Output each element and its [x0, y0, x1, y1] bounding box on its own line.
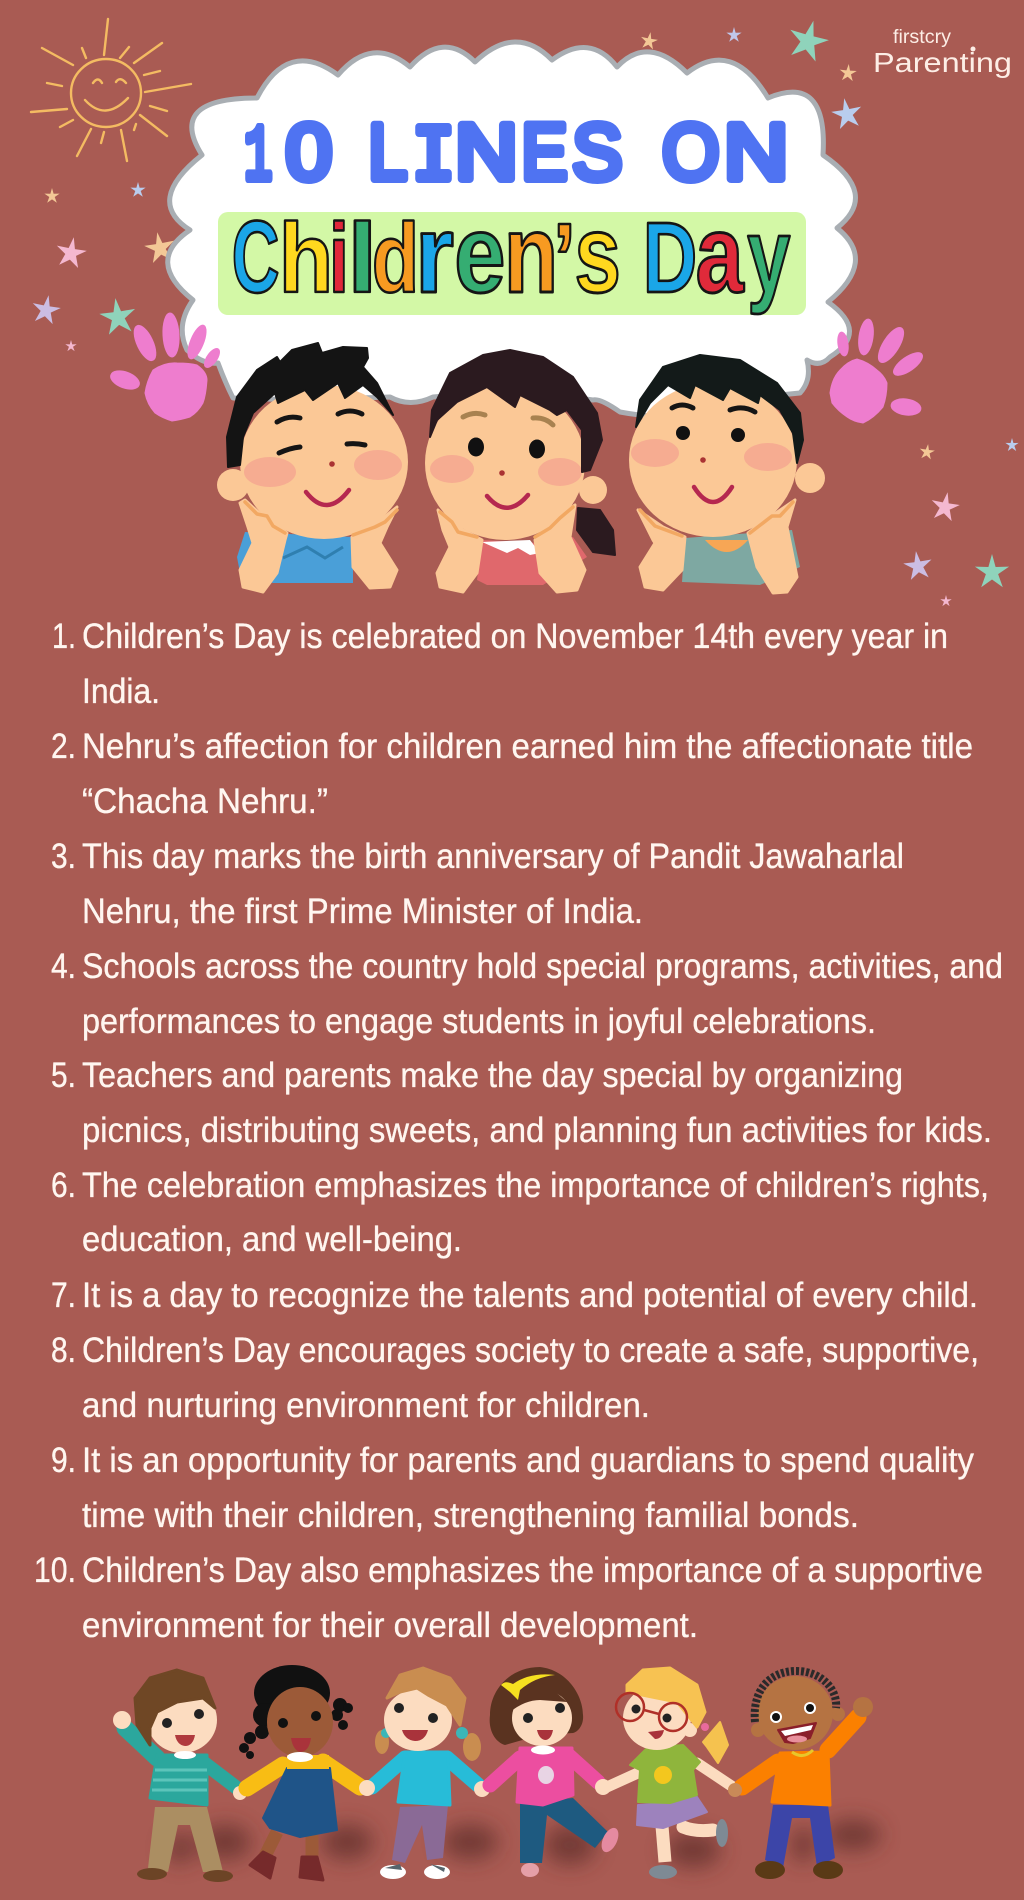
- heading plate: Children's Day: s: [574, 191, 621, 316]
- item 6: education, and well-being.: [82, 1220, 462, 1259]
- item 1: India.: [82, 672, 160, 711]
- illustration: six children holding hands: [113, 1665, 881, 1882]
- item 10: 10.: [34, 1551, 76, 1590]
- heading: 10 LINES ON: N: [724, 108, 788, 196]
- title cloud panel: [168, 42, 855, 416]
- item 2: 2.: [51, 727, 76, 766]
- child 3: blue sweater: [359, 1668, 490, 1879]
- heading plate: Children's Day: l: [348, 203, 377, 313]
- heading plate: Children's Day: [218, 191, 806, 317]
- item 3: [51, 837, 904, 931]
- illustration: three kids resting chins on hands: [217, 343, 825, 593]
- heading plate: Children's Day: D: [643, 202, 697, 313]
- heading: 10 LINES ON: [244, 108, 788, 203]
- heading plate: Children's Day: C: [232, 201, 279, 315]
- item 4: [51, 947, 1003, 1041]
- heading plate: Children's Day: ’: [553, 204, 576, 314]
- item 9: 9.: [51, 1441, 76, 1480]
- item 10: [34, 1551, 983, 1645]
- heading plate: Children's Day: y: [747, 196, 791, 315]
- item 4: performances to engage students in joyful celebrations.: [82, 1002, 876, 1041]
- item 6: [51, 1166, 989, 1259]
- item 1: 1.: [52, 617, 76, 656]
- item 2: Nehru’s affection for children earned him the affectionate title: [82, 727, 973, 766]
- heading plate: Children's Day: e: [454, 192, 506, 316]
- heading plate: Children's Day: a: [696, 193, 744, 317]
- item 7: 7.: [51, 1276, 76, 1315]
- item 3: This day marks the birth anniversary of Pandit Jawaharlal: [82, 837, 904, 876]
- heading plate: Children's Day: i: [329, 204, 349, 314]
- item 8: 8.: [51, 1331, 76, 1370]
- item 3: 3.: [51, 837, 76, 876]
- heading: 10 LINES ON: 1: [244, 114, 272, 203]
- logo: FirstCry Parenting: Parenting: [873, 47, 1012, 78]
- item 10: environment for their overall development.: [82, 1606, 698, 1645]
- heading: 10 LINES ON: N: [455, 108, 518, 196]
- item 1: Children’s Day is celebrated on November 14th every year in: [82, 617, 948, 656]
- item 8: and nurturing environment for children.: [82, 1386, 650, 1425]
- child 2: navy overalls: [239, 1665, 360, 1880]
- icon: right pink handprint: [830, 318, 926, 423]
- logo: FirstCry Parenting: [873, 27, 1012, 78]
- child 4: pink sweater: [490, 1667, 622, 1877]
- item 4: 4.: [51, 947, 76, 986]
- heading: 10 LINES ON: O: [662, 109, 719, 197]
- kid 3: boy in teal: [629, 355, 825, 593]
- item 8: [51, 1331, 979, 1425]
- heading: 10 LINES ON: E: [522, 108, 567, 196]
- item 6: 6.: [51, 1166, 76, 1205]
- decorative stars: [30, 16, 1019, 606]
- ground shadows: [166, 1819, 881, 1868]
- item 9: time with their children, strengthening familial bonds.: [82, 1496, 859, 1535]
- icon: smiling sun: [31, 19, 191, 161]
- item 2: “Chacha Nehru.”: [82, 782, 328, 821]
- item 5: picnics, distributing sweets, and planning fun activities for kids.: [82, 1111, 992, 1150]
- item 9: [51, 1441, 974, 1535]
- item 5: [51, 1056, 992, 1150]
- heading plate: Children's Day: r: [415, 193, 454, 316]
- heading plate: Children's Day: h: [279, 203, 333, 313]
- heading plate: Children's Day: d: [372, 203, 419, 313]
- item 9: It is an opportunity for parents and guardians to spend quality: [82, 1441, 974, 1480]
- child 1: teal sweater: [113, 1670, 247, 1882]
- heading: 10 LINES ON: I: [412, 113, 455, 203]
- item 3: Nehru, the first Prime Minister of India.: [82, 892, 643, 931]
- item 5: Teachers and parents make the day special by organizing: [82, 1056, 903, 1095]
- child 6: orange sweater: [728, 1671, 873, 1879]
- icon: left pink handprint: [108, 313, 222, 421]
- child 5: green shirt and glasses: [607, 1668, 733, 1879]
- kid 2: girl in pink: [425, 350, 615, 592]
- item 2: [51, 727, 973, 821]
- numbered list: [34, 617, 1003, 1645]
- kid 1: boy in blue: [217, 343, 408, 592]
- heading: 10 LINES ON: S: [572, 108, 622, 196]
- item 7: It is a day to recognize the talents and potential of every child.: [82, 1276, 978, 1315]
- heading: 10 LINES ON: 0: [286, 109, 332, 197]
- item 5: 5.: [51, 1056, 76, 1095]
- logo: FirstCry Parenting: firstcry: [893, 27, 952, 48]
- item 1: [52, 617, 948, 711]
- heading: 10 LINES ON: L: [368, 108, 407, 196]
- heading plate: Children's Day: n: [504, 193, 558, 316]
